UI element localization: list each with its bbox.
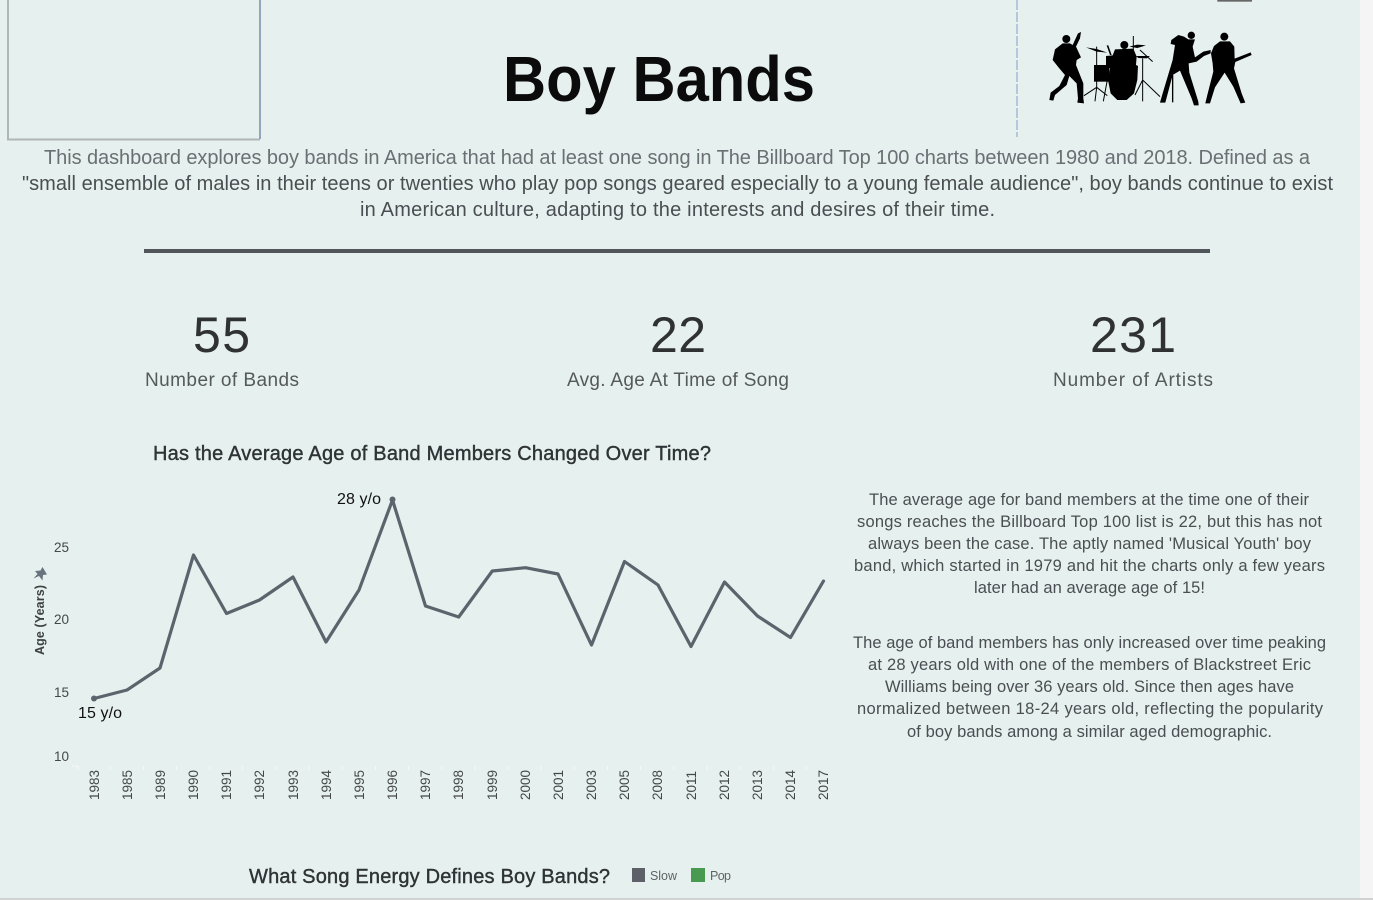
x axis labels: 1990: [186, 770, 201, 800]
legend: Pop: [710, 869, 731, 883]
x axis labels: 2014: [783, 769, 798, 800]
y axis title: Age (Years): [33, 585, 47, 655]
stat: number of bands: Number of Bands: [145, 370, 299, 391]
y axis labels: 10: [54, 749, 69, 764]
x axis labels: 2005: [617, 770, 632, 800]
commentary paragraph one: [854, 491, 1325, 597]
label: 15 y/o: 15 y/o: [78, 705, 122, 722]
divider line: [144, 249, 1210, 253]
x axis labels: 2003: [584, 770, 599, 800]
y axis labels: 20: [54, 612, 69, 627]
x axis labels: 2001: [551, 770, 566, 800]
maximum point: [390, 496, 396, 502]
commentary paragraph two: [853, 634, 1326, 741]
singer: [1160, 32, 1211, 105]
commentary paragraph two: normalized between 18-24 years old, reflecting the popularity: [857, 700, 1324, 718]
intro text: "small ensemble of males in their teens or twenties who play pop songs geared especially to a young female audience", boy bands continue to exist: [22, 173, 1333, 195]
y axis labels: [54, 540, 69, 764]
commentary paragraph one: later had an average age of 15!: [974, 579, 1205, 597]
y axis labels: 25: [54, 540, 69, 555]
commentary paragraph one: always been the case. The aptly named 'Musical Youth' boy: [868, 535, 1312, 553]
x axis labels: 1998: [451, 770, 466, 800]
minimum point: [91, 696, 97, 702]
x axis labels: 2017: [816, 770, 831, 800]
x axis labels: 2013: [750, 770, 765, 800]
x axis labels: 1995: [352, 770, 367, 800]
y axis labels: 15: [54, 685, 69, 700]
x axis labels: 2011: [684, 771, 699, 800]
commentary paragraph two: The age of band members has only increased over time peaking: [853, 634, 1326, 652]
intro text: This dashboard explores boy bands in America that had at least one song in The Billboard Top 100 charts between 1980 and 2018. Defined as a: [44, 147, 1311, 169]
x axis labels: 2008: [650, 770, 665, 800]
x axis labels: 1997: [418, 770, 433, 800]
label: 28 y/o: 28 y/o: [337, 491, 381, 508]
commentary paragraph one: songs reaches the Billboard Top 100 list is 22, but this has not: [857, 513, 1322, 531]
x axis labels: 1989: [153, 770, 168, 800]
commentary paragraph one: band, which started in 1979 and hit the charts only a few years: [854, 557, 1325, 575]
x axis ticks: [72, 766, 806, 770]
x axis labels: 1985: [120, 770, 135, 800]
stat: number of bands: 55: [193, 307, 250, 363]
age line: [94, 500, 824, 698]
commentary paragraph two: at 28 years old with one of the members of Blackstreet Eric: [868, 656, 1311, 674]
x axis labels: 1994: [319, 769, 334, 800]
x axis labels: 1993: [286, 770, 301, 800]
icon: band silhouette: [1049, 0, 1252, 105]
intro text: [22, 147, 1333, 221]
stat: number of artists: Number of Artists: [1053, 370, 1213, 391]
stat: number of artists: [1053, 307, 1213, 391]
song energy heading: What Song Energy Defines Boy Bands?: [249, 866, 610, 888]
stat: number of artists: 231: [1090, 307, 1176, 363]
commentary paragraph two: of boy bands among a similar aged demographic.: [907, 723, 1272, 741]
x axis labels: 1991: [219, 770, 234, 800]
stat: average age: 22: [650, 307, 706, 363]
legend: [632, 868, 731, 883]
drum kit: [1084, 36, 1160, 101]
x axis labels: 2012: [717, 770, 732, 800]
x axis labels: 1999: [485, 770, 500, 800]
commentary paragraph two: Williams being over 36 years old. Since then ages have: [885, 678, 1294, 696]
guitarist right: [1205, 33, 1252, 103]
legend: Slow: [650, 869, 678, 883]
line chart: average age by year: [33, 491, 831, 800]
stat: number of bands: [145, 307, 299, 391]
stat: average age: [567, 307, 789, 391]
x axis labels: [87, 769, 831, 800]
x axis labels: 2000: [518, 770, 533, 800]
guitarist left: [1049, 32, 1084, 103]
chart heading: Has the Average Age of Band Members Changed Over Time?: [153, 443, 711, 465]
title: Boy Bands: [503, 43, 815, 115]
x axis labels: 1983: [87, 770, 102, 800]
intro text: in American culture, adapting to the interests and desires of their time.: [360, 199, 995, 221]
dashed divider beside band image: [1016, 0, 1018, 137]
stat: average age: Avg. Age At Time of Song: [567, 370, 789, 391]
empty image placeholder frame: [8, 0, 260, 140]
commentary paragraph one: The average age for band members at the time one of their: [869, 491, 1310, 509]
x axis labels: 1996: [385, 770, 400, 800]
x axis labels: 1992: [252, 770, 267, 800]
